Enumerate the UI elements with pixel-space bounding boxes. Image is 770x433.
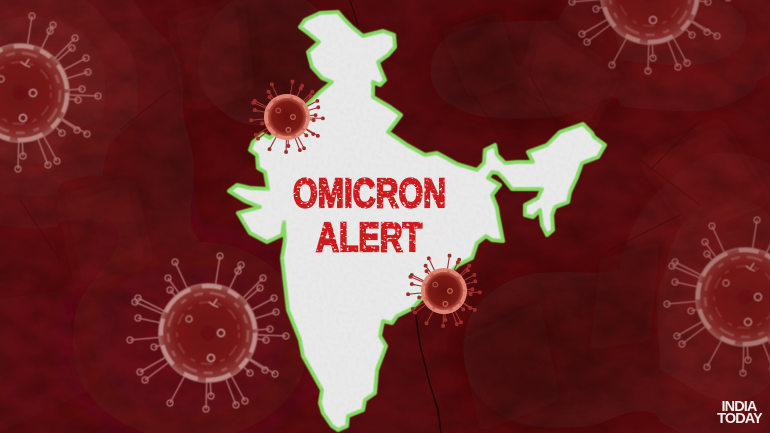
map of India with green outline — [225, 8, 610, 433]
logo: India Today — [717, 399, 763, 427]
logo: India Today: INDIA — [722, 399, 758, 415]
heading: OMICRON ALERT: OMICRON — [293, 170, 446, 216]
heading: OMICRON ALERT — [293, 170, 446, 260]
heading: OMICRON ALERT: ALERT — [316, 214, 422, 260]
virus: lower left of map — [127, 253, 289, 412]
virus: left edge — [0, 13, 101, 172]
virus: right edge — [664, 217, 770, 376]
virus: on east coast of map — [407, 254, 481, 327]
virus: top right — [569, 0, 731, 74]
virus: on north-west border of map — [250, 80, 324, 153]
logo: India Today: TODAY — [717, 411, 763, 427]
